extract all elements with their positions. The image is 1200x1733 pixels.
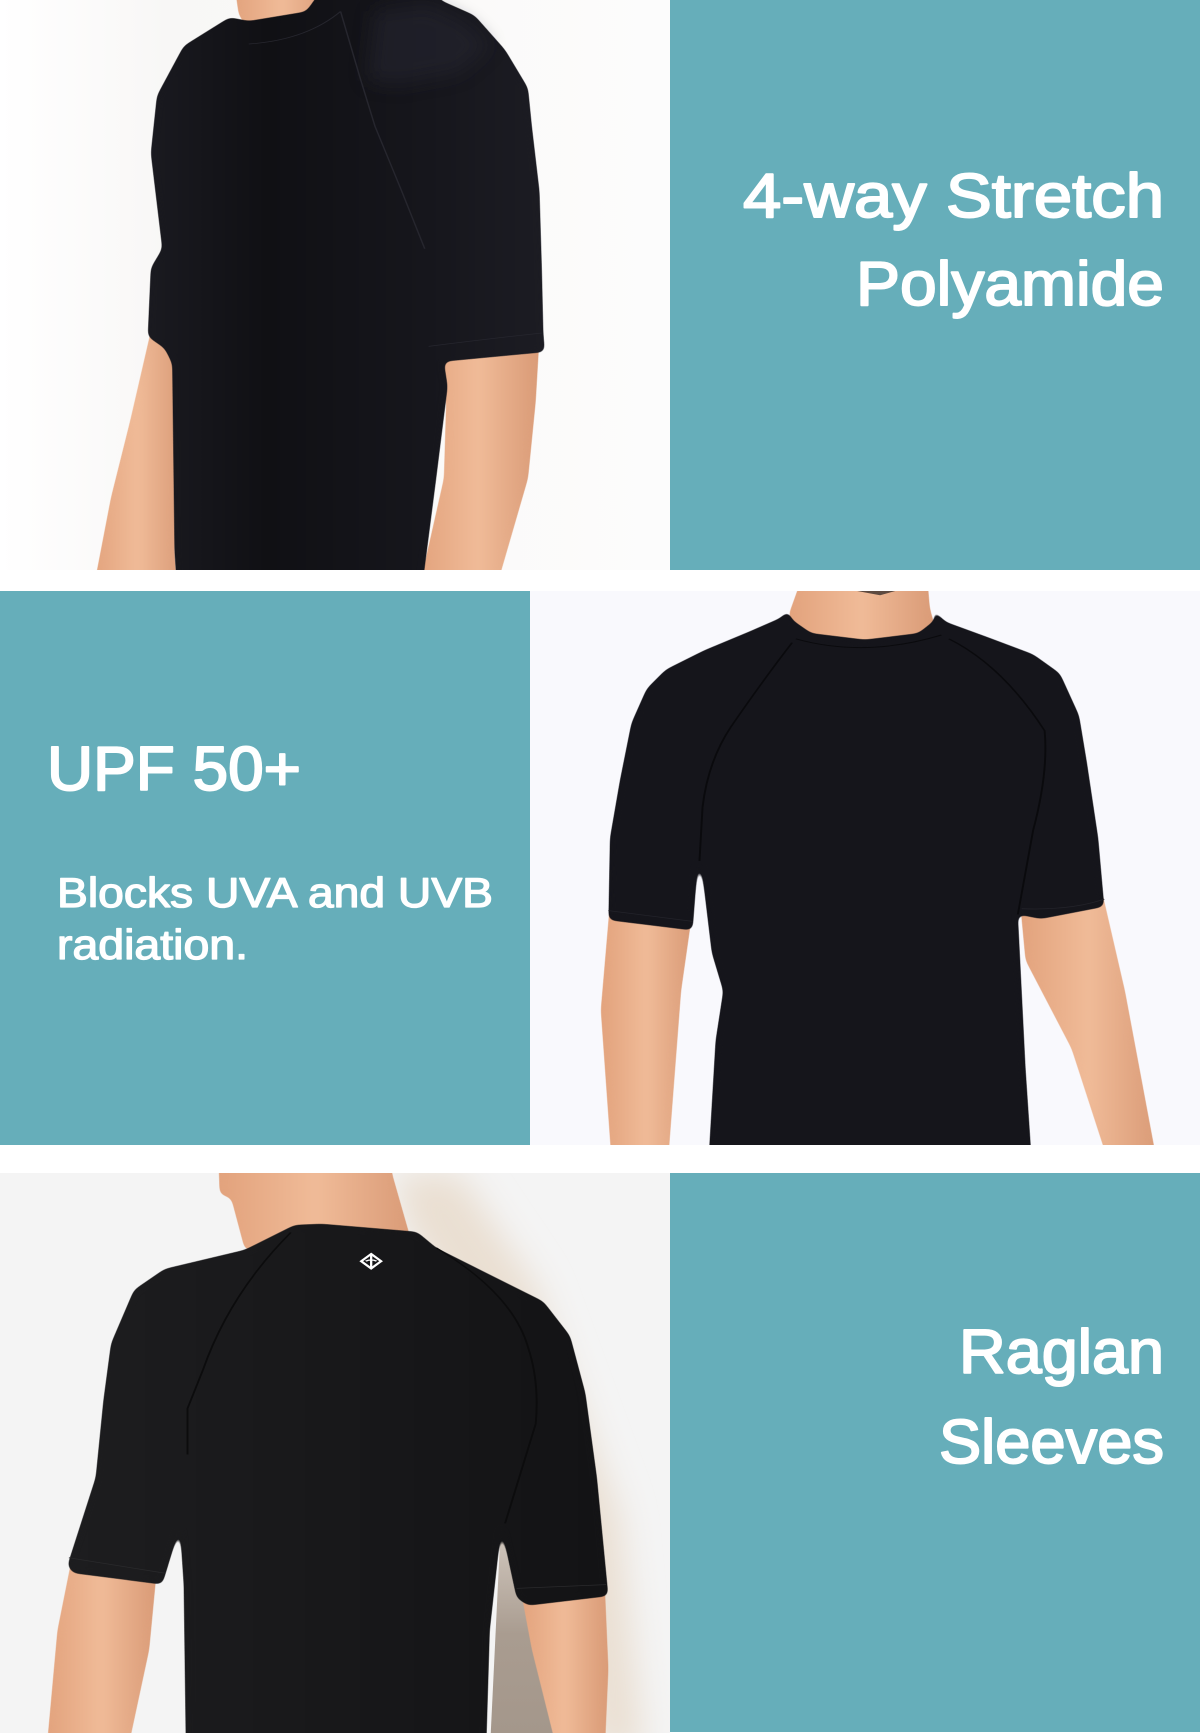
text: UVA and UVB description: Blocks UVA and UVB xyxy=(57,869,493,916)
heading: Raglan Sleeves: Sleeves xyxy=(939,1408,1164,1477)
photo: front view of black shirt xyxy=(600,591,1154,1145)
neck and arms skin xyxy=(92,0,540,597)
stubble xyxy=(857,591,895,595)
heading: 4-way Stretch Polyamide: Polyamide xyxy=(856,250,1164,319)
panel: raglan sleeves xyxy=(670,1173,1200,1732)
heading: 4-way Stretch Polyamide xyxy=(743,162,1164,319)
shirt xyxy=(148,0,545,597)
panel: UPF 50+ xyxy=(0,591,530,1145)
photo: back view of black shirt xyxy=(0,1148,670,1733)
heading: 4-way Stretch Polyamide: 4-way Stretch xyxy=(743,162,1164,231)
shirt xyxy=(67,1224,608,1733)
heading: Raglan Sleeves xyxy=(939,1318,1164,1477)
neck and arms skin xyxy=(601,562,1159,1171)
shoulder sheen and seam xyxy=(367,4,490,84)
text: UVA and UVB description xyxy=(57,869,493,968)
photo: side view of black shirt xyxy=(96,0,544,570)
seams xyxy=(699,635,1045,914)
heading: UPF 50+: UPF 50+ xyxy=(47,735,301,804)
neck and arms skin xyxy=(46,1148,608,1733)
heading: Raglan Sleeves: Raglan xyxy=(959,1318,1164,1387)
wall shadow xyxy=(394,1173,643,1733)
shirt xyxy=(608,605,1104,1171)
icon: neck logo xyxy=(361,1254,381,1268)
sleeve seams xyxy=(187,1233,537,1523)
panel: 4-way stretch polyamide xyxy=(670,0,1200,570)
text: UVA and UVB description: radiation. xyxy=(57,921,248,968)
